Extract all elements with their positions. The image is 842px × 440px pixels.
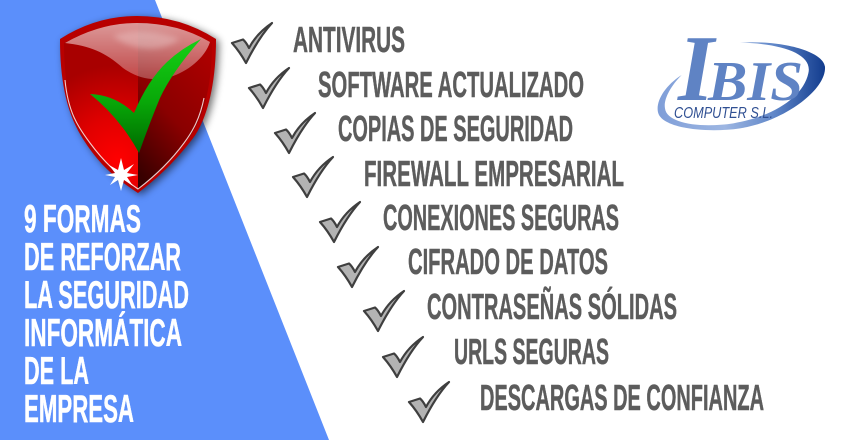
item: cifrado de datos [338,241,608,287]
title: DE LA [24,350,89,393]
item: descargas de confianza [409,377,764,422]
logo: Ibis Computer S.L.: BIS [707,51,803,113]
item: contraseñas sólidas [364,285,677,331]
title: EMPRESA [24,388,134,431]
title: 9 FORMAS [24,198,141,241]
item: firewall empresarial: FIREWALL EMPRESARIAL [364,153,624,194]
title: LA SEGURIDAD [24,274,189,317]
item: antivirus [232,19,405,63]
logo: Ibis Computer S.L.: I [677,17,717,121]
item: antivirus: ANTIVIRUS [293,19,405,60]
blue panel [0,0,329,440]
item: software actualizado: SOFTWARE ACTUALIZADO [318,64,584,105]
item: firewall empresarial [293,153,624,197]
item: software actualizado [249,64,584,108]
icon: security shield [60,16,219,195]
icon: green check mark [90,39,201,153]
item: cifrado de datos: CIFRADO DE DATOS [408,241,608,282]
title: DE REFORZAR [24,236,181,279]
item: urls seguras: URLS SEGURAS [454,331,609,372]
item: conexiones seguras [320,197,619,242]
logo: Ibis Computer S.L.: COMPUTER S.L. [674,105,773,122]
checklist [232,19,764,422]
icon: sparkle [105,158,138,191]
item: copias de seguridad: COPIAS DE SEGURIDAD [338,108,573,149]
title [24,198,189,431]
title: INFORMÁTICA [24,311,182,355]
item: copias de seguridad [275,108,573,153]
item: conexiones seguras: CONEXIONES SEGURAS [383,197,619,238]
item: urls seguras [383,331,609,377]
logo: Ibis Computer S.L. [658,17,825,130]
